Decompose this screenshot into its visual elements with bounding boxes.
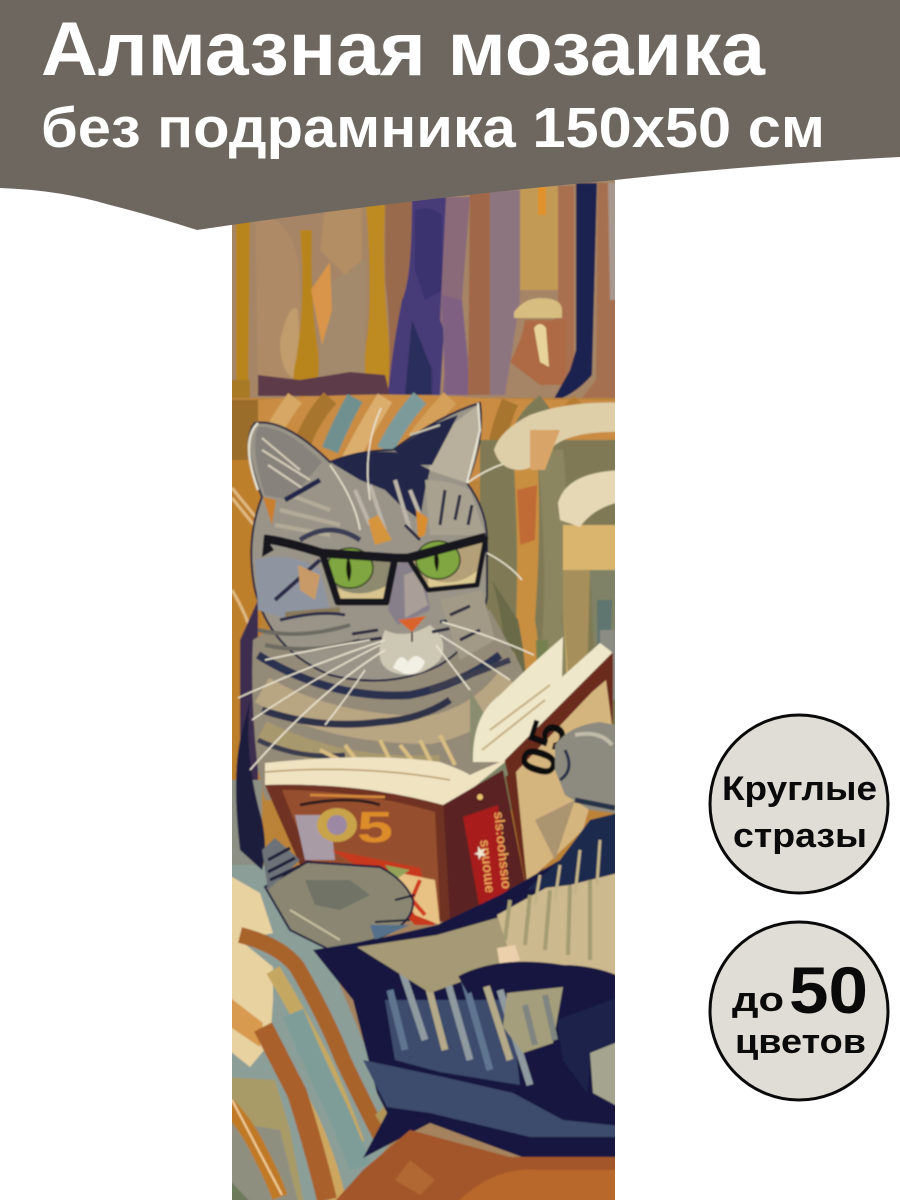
cover numerals (317, 808, 357, 842)
dark crown (330, 452, 430, 520)
front cover (265, 785, 450, 925)
dark hind leg (313, 810, 630, 1160)
left cheek (255, 557, 330, 620)
painting: cat reading a book (232, 180, 615, 1200)
badge: up to 50 colours: до (732, 981, 784, 1019)
thigh fur (356, 916, 508, 993)
armchair (220, 394, 630, 900)
open book: snuoɯe (477, 839, 499, 894)
armchair lower left stripes (232, 864, 390, 1200)
open book (265, 637, 613, 927)
badge: round rhinestones (710, 715, 888, 893)
badge: round rhinestones: стразы (733, 817, 867, 855)
nose bridge (388, 562, 430, 624)
big numerals: 05 (508, 713, 579, 783)
right ear (428, 405, 480, 483)
cat body (236, 610, 535, 870)
right cheek (446, 602, 494, 660)
header banner (0, 0, 900, 230)
whiskers (238, 408, 534, 770)
left pages (265, 757, 505, 810)
open book: 5 (357, 803, 393, 852)
badge: up to 50 colours: цветов (735, 1023, 866, 1061)
subtitle: без подрамника 150х50 см (41, 96, 825, 160)
forehead markings (368, 515, 392, 545)
left paw (262, 838, 415, 950)
orange seat cushion (327, 1130, 630, 1200)
left ear (255, 427, 322, 500)
badge: up to 50 colours (710, 922, 888, 1100)
badge: round rhinestones: Круглые (722, 770, 877, 808)
nose (398, 616, 426, 632)
muzzle (379, 625, 443, 675)
curtain background (232, 182, 615, 399)
right page (473, 637, 613, 762)
open book: sls:oohssıo (491, 811, 515, 890)
cat head (249, 403, 495, 681)
red label (462, 804, 509, 906)
title: Алмазная мозаика (41, 7, 766, 92)
glasses with green eyes (262, 535, 486, 603)
back cover (503, 652, 613, 892)
badge: up to 50 colours: 50 (789, 953, 868, 1027)
spine (443, 770, 527, 925)
right paw (554, 722, 615, 814)
